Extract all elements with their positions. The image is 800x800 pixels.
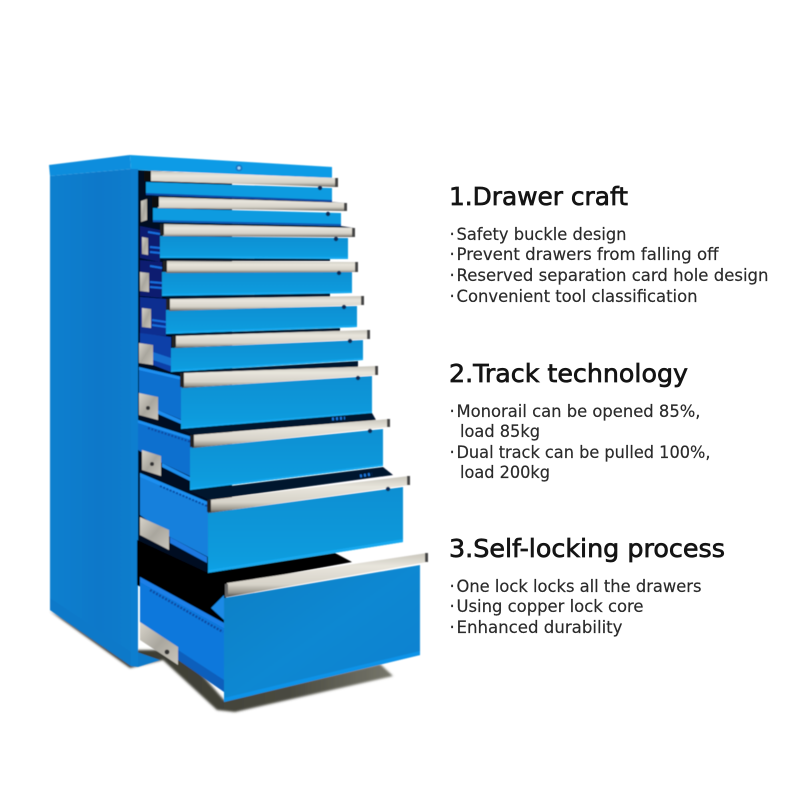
drawer 10	[137, 540, 428, 702]
drawer 2	[141, 195, 347, 226]
list 1: Prevent drawers from falling off	[456, 245, 719, 264]
drawer 4	[140, 258, 358, 298]
drawer cabinet illustration	[49, 155, 428, 712]
list 1: ·	[450, 245, 455, 264]
list 2: load 85kg	[460, 422, 540, 441]
heading 1: 1.Drawer craft	[449, 182, 628, 211]
cabinet front frame	[130, 155, 332, 178]
list 2: Dual track can be pulled 100%,	[456, 443, 710, 462]
list 1	[450, 225, 768, 306]
drawer 6	[139, 328, 370, 372]
drawer 1	[144, 171, 338, 202]
section 2: track technology	[449, 359, 710, 482]
drawer 7	[139, 361, 378, 429]
section 1: drawer craft	[449, 182, 768, 306]
list 2	[450, 402, 710, 482]
list 3: ·	[450, 618, 455, 637]
floor shadow	[50, 611, 393, 712]
cabinet side panel	[50, 169, 131, 666]
list 1: Safety buckle design	[456, 225, 626, 244]
heading 3: 3.Self-locking process	[449, 534, 725, 563]
list 3: One lock locks all the drawers	[456, 577, 702, 596]
lock	[236, 165, 242, 171]
list 3: Using copper lock core	[456, 597, 644, 616]
cabinet interior	[137, 170, 232, 582]
drawer 8	[138, 413, 390, 490]
heading 2: 2.Track technology	[449, 359, 688, 388]
list 3: ·	[450, 577, 455, 596]
list 1: ·	[450, 287, 455, 306]
list 1: Reserved separation card hole design	[456, 266, 768, 285]
list 1: ·	[450, 225, 455, 244]
cabinet front post	[131, 169, 138, 666]
cabinet side top edge	[49, 155, 131, 176]
list 2: Monorail can be opened 85%,	[456, 402, 700, 421]
list 3	[450, 577, 702, 637]
drawer 3	[140, 222, 355, 262]
drawer 9	[140, 467, 410, 573]
list 3: ·	[450, 597, 455, 616]
cabinet base trim	[50, 598, 160, 667]
list 1: ·	[450, 266, 455, 285]
list 2: ·	[450, 443, 455, 462]
section 3: self-locking process	[449, 534, 725, 637]
list 3: Enhanced durability	[456, 618, 623, 637]
list 2: load 200kg	[460, 463, 550, 482]
drawer 5	[140, 294, 364, 336]
list 2: ·	[450, 402, 455, 421]
list 1: Convenient tool classification	[456, 287, 698, 306]
